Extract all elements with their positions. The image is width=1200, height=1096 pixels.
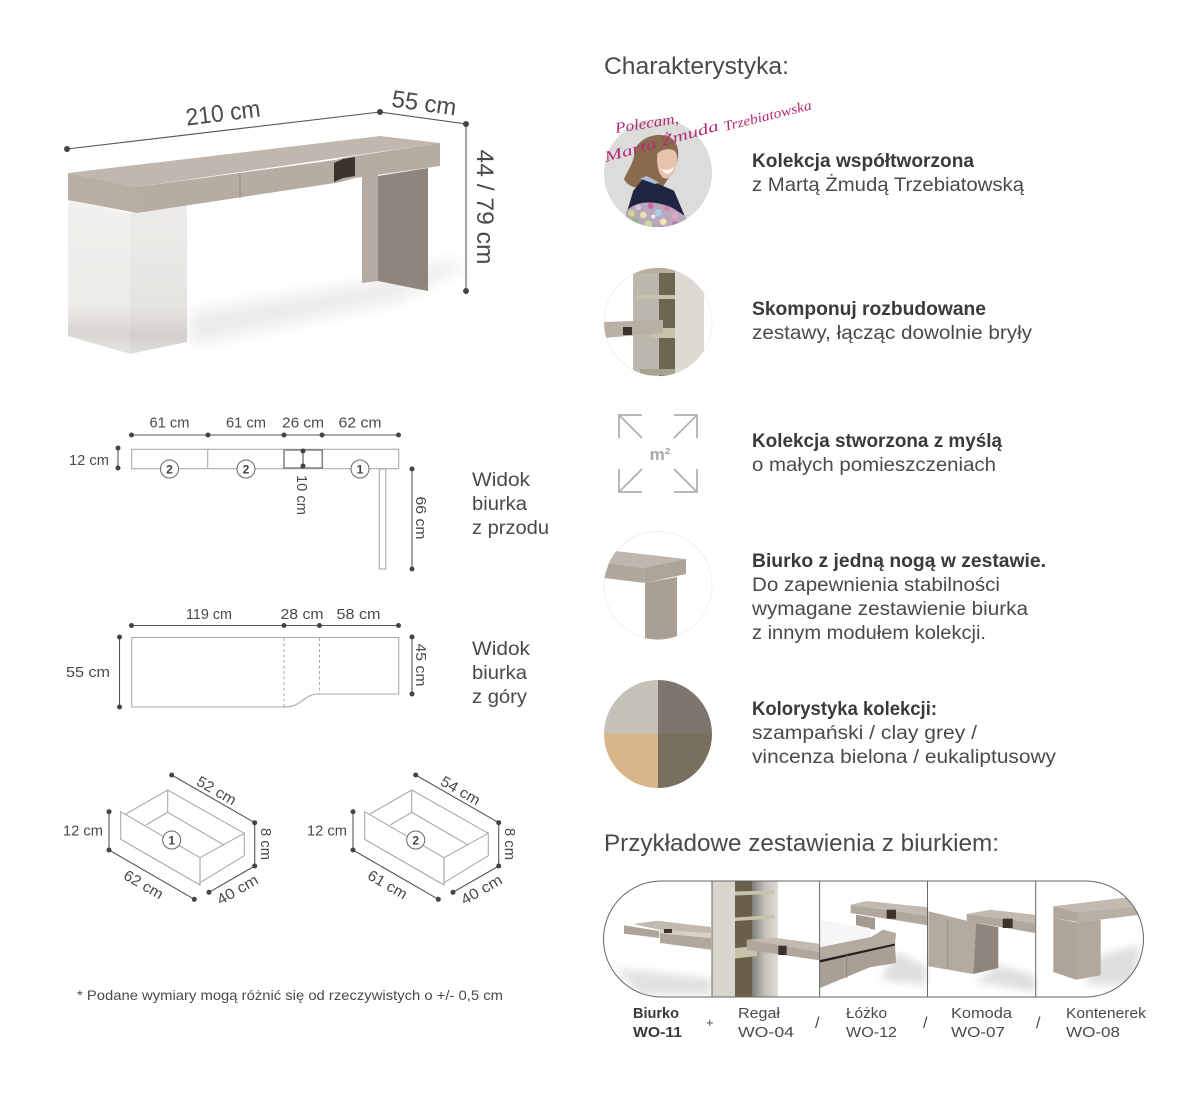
dimensions: 40 cm: [214, 871, 261, 909]
dimensions: [63, 772, 274, 909]
example: bed: [820, 901, 927, 988]
feature text: [752, 699, 1057, 768]
pill outline and dividers: [604, 881, 1144, 997]
label: Biurko WO-11: WO-11: [633, 1024, 682, 1041]
technical drawing: top view: [66, 606, 531, 710]
caption: front view: [472, 470, 549, 539]
badge 1: [163, 831, 181, 849]
height dimension: 12 cm: 12 cm: [69, 452, 109, 469]
label: Biurko WO-11: [633, 1005, 682, 1041]
dimensions: 62 cm: [120, 867, 166, 903]
feature text: [752, 299, 1033, 344]
signature: [601, 99, 813, 166]
label: Kontenerek WO-08: Kontenerek: [1066, 1005, 1147, 1022]
ghost leg: [68, 200, 187, 354]
feature 1: designer collaboration: [600, 99, 1024, 231]
badge 1: 1: [168, 834, 175, 848]
width dimensions: 119 cm: [186, 606, 232, 623]
drawer 1 diagram: [63, 772, 274, 909]
desk leg: [362, 168, 428, 291]
signature: Marta Żmuda: [601, 119, 721, 166]
label: Komoda WO-07: Komoda: [951, 1005, 1013, 1022]
product render: desk with dimensions: [64, 86, 498, 354]
caption: top view: biurka: [472, 663, 527, 684]
dimensions: 54 cm: [437, 773, 483, 809]
caption: front view: biurka: [472, 494, 527, 515]
leg height: 66 cm: 66 cm: [412, 496, 429, 540]
dimension lines: [64, 109, 469, 294]
width dimensions: 58 cm: [336, 606, 380, 623]
drawer 2 diagram: [307, 772, 518, 909]
width dimensions: 62 cm: [338, 414, 382, 432]
separator: /: [1036, 1015, 1041, 1032]
drawer number badges: 2: [166, 462, 173, 476]
opening height: 10 cm: [293, 448, 310, 515]
heading: example sets: Przykładowe zestawienia z biurkiem:: [604, 830, 999, 857]
colour swatch circle: [604, 680, 712, 788]
label: 44 / 79 cm: 44 / 79 cm: [471, 150, 498, 264]
label: Komoda WO-07: [951, 1005, 1013, 1041]
signature: Polecam,: [613, 111, 680, 137]
drawer number badges: 1: [357, 462, 364, 476]
technical drawing: front view: [69, 414, 549, 572]
label: Regał WO-04: [738, 1005, 794, 1041]
drawer outline: [365, 790, 488, 885]
feature 5: colours: [604, 680, 1057, 788]
caption: top view: [472, 639, 531, 708]
dimensions: 8 cm: [257, 828, 274, 860]
feature text: Do zapewnienia stabilności: [752, 575, 1000, 596]
feature text: [752, 431, 1002, 476]
badge 2: [407, 831, 425, 849]
top outline: [132, 638, 399, 707]
depth dimension: 45 cm: [410, 634, 429, 696]
separator: /: [815, 1015, 820, 1032]
width dimensions: [129, 606, 401, 628]
feature text: o małych pomieszczeniach: [752, 455, 996, 476]
example: shelf: [712, 878, 819, 1000]
leg height: 66 cm: [410, 466, 429, 572]
icon: m2 with arrows: [619, 415, 697, 492]
width dimensions: [129, 414, 401, 438]
label: Komoda WO-07: WO-07: [951, 1024, 1005, 1041]
front outline: [132, 449, 399, 569]
width dimensions: 61 cm: [226, 414, 266, 432]
circular photo: shelving: [604, 265, 712, 380]
drawer number badges: [160, 460, 369, 478]
dimensions: 61 cm: [364, 867, 410, 903]
feature text: Biurko z jedną nogą w zestawie.: [752, 551, 1046, 572]
label: Regał WO-04: WO-04: [738, 1024, 794, 1041]
icon: m2 with arrows: m²: [650, 445, 671, 464]
label: Regał WO-04: Regał: [738, 1005, 781, 1022]
drawer outline: [121, 790, 244, 885]
feature 4: one-legged desk: [604, 532, 1046, 644]
caption: front view: z przodu: [472, 518, 549, 539]
badge 2: 2: [412, 834, 419, 848]
feature text: Kolorystyka kolekcji:: [752, 699, 937, 720]
dimensions: 8 cm: [501, 828, 518, 860]
example: chest of drawers: [928, 910, 1035, 992]
label: Łóżko WO-12: WO-12: [846, 1024, 897, 1041]
feature text: [751, 551, 1046, 644]
width dimensions: 28 cm: [280, 606, 324, 623]
label: Kontenerek WO-08: [1066, 1005, 1147, 1041]
label: Łóżko WO-12: Łóżko: [846, 1005, 887, 1022]
feature text: wymagane zestawienie biurka: [751, 599, 1028, 620]
desk top: [68, 136, 440, 213]
example: container: [1053, 897, 1140, 985]
feature text: Skomponuj rozbudowane: [752, 299, 986, 320]
feature text: Kolekcja stworzona z myślą: [752, 431, 1002, 452]
height dimension: 12 cm: [69, 446, 120, 470]
dimensions: 40 cm: [458, 871, 505, 909]
feature 3: small rooms: [619, 415, 1002, 492]
feature text: zestawy, łącząc dowolnie bryły: [752, 323, 1033, 344]
portrait: [604, 119, 712, 227]
label: 210 cm: 210 cm: [184, 96, 262, 132]
label: Kontenerek WO-08: WO-08: [1066, 1024, 1120, 1041]
circular photo: desk corner: [604, 532, 712, 640]
depth dimension: 45 cm: 45 cm: [412, 644, 429, 686]
label: Łóżko WO-12: [846, 1005, 897, 1041]
depth dimension: 55 cm: 55 cm: [66, 664, 110, 681]
caption: front view: Widok: [472, 470, 531, 491]
depth dimension: 55 cm: [66, 634, 122, 710]
feature 2: modular sets: [604, 265, 1033, 380]
dimensions: [307, 772, 518, 909]
example: desk alone: [615, 921, 711, 995]
feature text: z Martą Żmudą Trzebiatowską: [752, 175, 1024, 196]
opening height: 10 cm: 10 cm: [293, 475, 310, 515]
feature text: szampański / clay grey /: [752, 723, 978, 744]
caption: top view: z góry: [472, 687, 528, 708]
separator: /: [923, 1015, 928, 1032]
dimensions: 12 cm: [63, 822, 103, 840]
drawer number badges: 2: [243, 462, 250, 476]
footnote: * Podane wymiary mogą różnić się od rzeczywistych o +/- 0,5 cm: [77, 987, 503, 1003]
example set labels: [633, 1005, 1147, 1041]
caption: top view: Widok: [472, 639, 531, 660]
dimensions: 52 cm: [193, 773, 239, 809]
heading: Charakterystyka: Charakterystyka:: [604, 53, 789, 80]
feature text: vincenza bielona / eukaliptusowy: [752, 747, 1057, 768]
plus sign: +: [706, 1015, 714, 1030]
floor shadow: [190, 262, 470, 345]
signature: Trzebiatowska: [722, 99, 813, 135]
label: 55 cm: 55 cm: [390, 86, 458, 121]
width dimensions: 61 cm: [150, 414, 190, 432]
feature text: Kolekcja współtworzona: [752, 151, 974, 172]
example sets pill: [604, 878, 1144, 1000]
feature text: z innym modułem kolekcji.: [752, 623, 986, 644]
width dimensions: 26 cm: [282, 414, 324, 432]
feature text: [752, 151, 1024, 196]
label: Biurko WO-11: Biurko: [633, 1005, 679, 1022]
dimensions: 12 cm: [307, 822, 347, 840]
